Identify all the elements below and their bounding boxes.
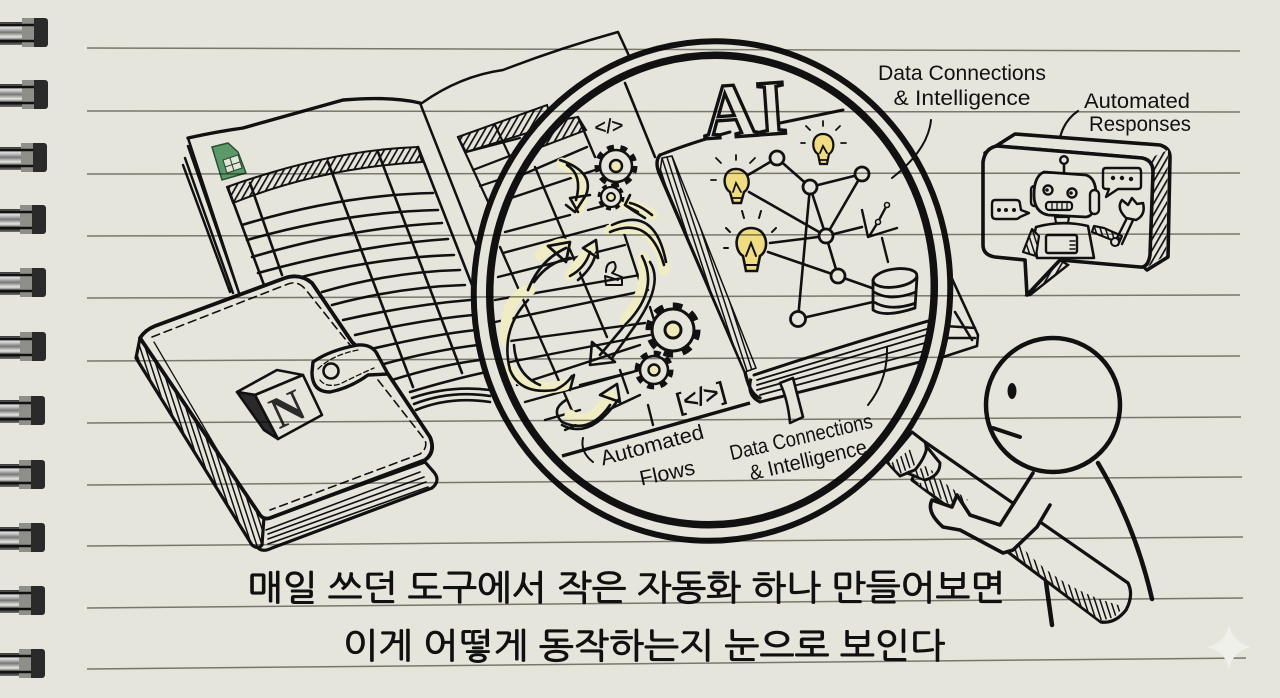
body back: [1098, 463, 1152, 599]
label: Automated Responses: Responses: [1089, 113, 1191, 136]
cover stitching: [152, 283, 426, 510]
bookmark: [780, 378, 803, 423]
open pages: [188, 32, 760, 420]
Korean caption: 이게 어떻게 동작하는지 눈으로 보인다: [343, 627, 945, 666]
bubble depth: [985, 134, 1170, 270]
icon: light bulbs: [711, 121, 846, 271]
AI heading: AI: [699, 63, 789, 156]
label: Automated Responses: [1084, 90, 1191, 136]
icon: gears: [598, 148, 696, 386]
magnifying glass handle: [887, 432, 1131, 622]
left table grid: [228, 147, 482, 392]
label: Data Connections and Intelligence: [878, 62, 1046, 110]
magnified sheet: page edges: [625, 83, 655, 157]
arm and hand: [930, 473, 1050, 553]
flow right swoop: [590, 220, 666, 365]
AI book: bottom edge: [752, 319, 928, 376]
page thickness bottom: [412, 389, 490, 410]
Notion planner: [136, 276, 437, 550]
label: Data Connections inside lens: [730, 417, 872, 480]
flow arrows: [507, 160, 666, 429]
small bubbles: [992, 168, 1141, 219]
label: Data Connections inside lens: Data Connections: [727, 410, 875, 465]
icon: Notion cube: N: [262, 379, 313, 438]
icon: database: [872, 266, 918, 314]
arrow: data connections leader: [892, 120, 931, 178]
AI book: cover: [750, 318, 928, 379]
label: Data Connections inside lens: & Intelligence: [747, 436, 869, 485]
arrow: responses leader: [1059, 111, 1078, 143]
right book outside the lens: [940, 270, 978, 358]
icon: small lock-like hand: [605, 262, 622, 285]
code tag bottom: [</>]: [673, 377, 729, 417]
code tag top: </>: [594, 115, 624, 139]
icon: Notion cube: [237, 370, 322, 439]
lens contents: [494, 80, 928, 486]
Korean caption: 매일 쓰던 도구에서 작은 자동화 하나 만들어보면: [248, 569, 1005, 608]
leg: [1046, 582, 1052, 625]
outer rim: [442, 10, 982, 572]
sparkle watermark: [1207, 625, 1251, 669]
inner rim: [459, 26, 965, 554]
planner pages and back cover: [257, 462, 437, 550]
right page table, outside the lens: [458, 105, 553, 152]
eye: [1008, 383, 1016, 399]
arrow up right large: [528, 242, 570, 290]
robot: [1023, 156, 1144, 258]
stick figure person: [930, 338, 1152, 625]
knowledge network: [748, 151, 873, 326]
planner cover: [140, 276, 432, 519]
planner spine: [136, 338, 264, 548]
AI book: page thickness: [748, 360, 919, 404]
leader lines inside lens: [582, 347, 887, 462]
bubble front: [983, 146, 1153, 295]
label: Data Connections and Intelligence: Data Connections: [878, 62, 1046, 85]
label: Automated Flows: Flows: [638, 456, 697, 491]
handle collars: [887, 432, 926, 476]
icon: Google Sheets: [212, 143, 246, 180]
magnified sheet: header hatch: [542, 116, 588, 148]
arrow up right small: [570, 240, 598, 280]
magnifying glass lens: [470, 38, 954, 544]
label: Automated Flows: Automated: [598, 421, 706, 470]
large loop: [507, 300, 572, 391]
Korean caption: [248, 569, 1005, 666]
small arrow top right: [625, 195, 652, 218]
label: Automated Flows: [602, 424, 704, 486]
yellow flow highlights: [505, 163, 664, 420]
page stack edges: [183, 146, 238, 293]
left table header: [227, 147, 422, 203]
label: Automated Responses: Automated: [1084, 90, 1190, 113]
spiral binding rings: [0, 18, 48, 678]
AI book: spine hatch: [660, 156, 756, 372]
head: [986, 338, 1120, 472]
lower hook arrow: [557, 384, 620, 429]
strap with snap: [312, 345, 388, 392]
magnified sheet: grid: [495, 117, 654, 430]
spreadsheet notebook: [183, 32, 760, 420]
robot speech bubble: [983, 134, 1170, 295]
curved arrow upper: [560, 160, 590, 212]
handle grip: [912, 442, 1131, 622]
mouth: [993, 428, 1020, 437]
icon: mini chart: [862, 202, 897, 262]
label: Data Connections and Intelligence: & Intelligence: [894, 87, 1030, 110]
